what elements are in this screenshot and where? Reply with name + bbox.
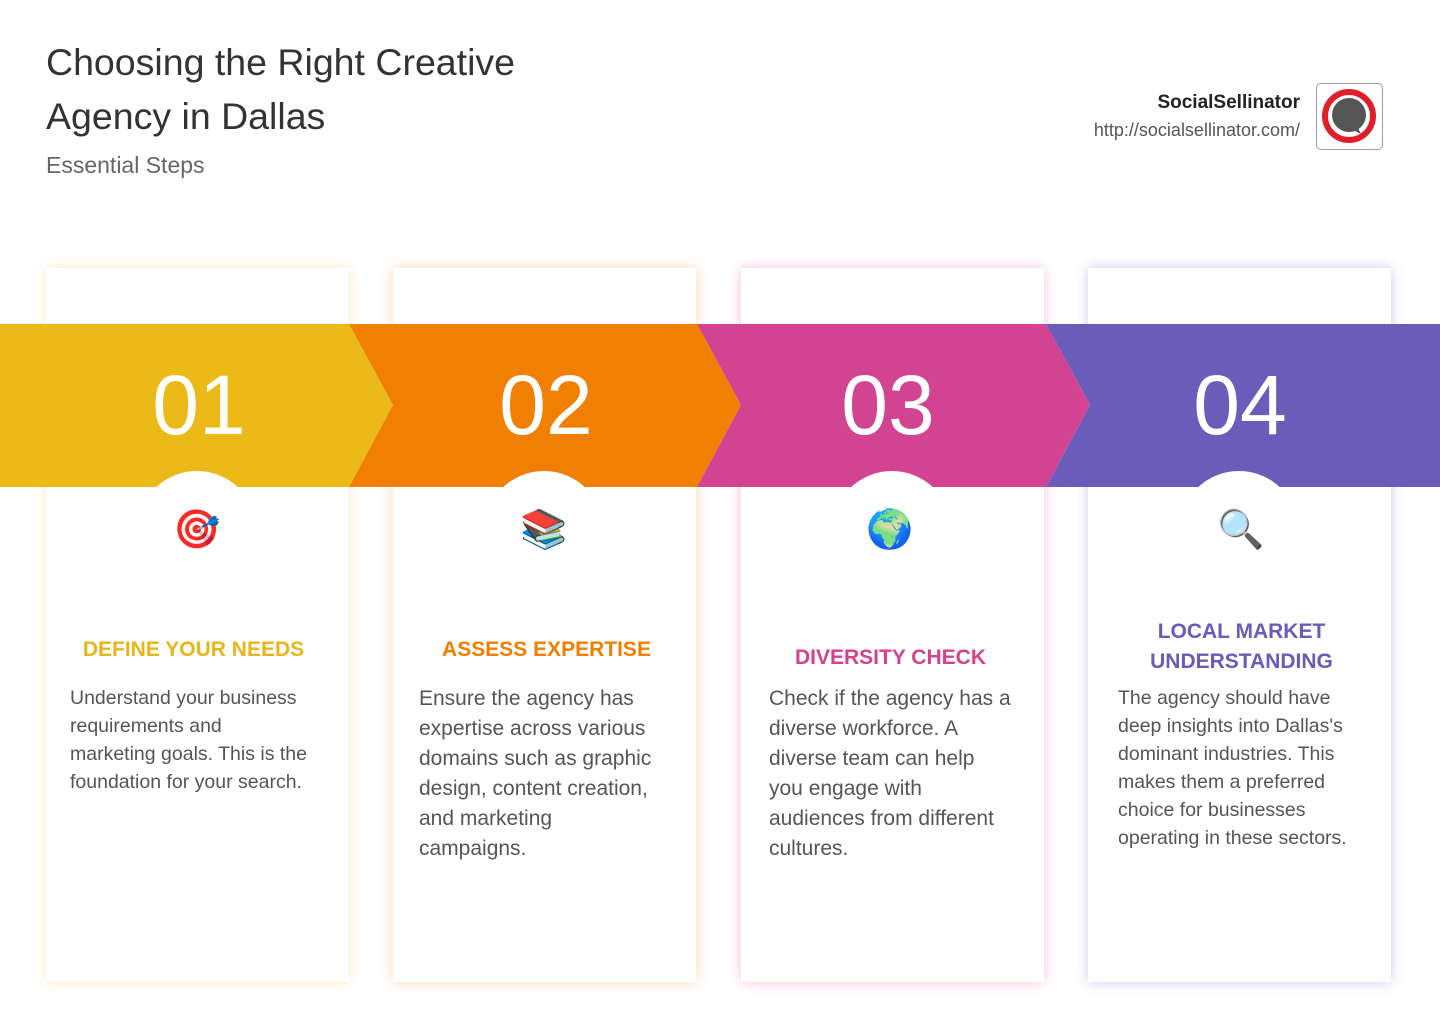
icon: books: 📚 xyxy=(520,509,568,551)
arrow band: 01 xyxy=(152,358,246,452)
text 2: design, content creation, xyxy=(419,777,648,800)
text 1: marketing goals. This is the xyxy=(70,743,307,765)
card 2 xyxy=(393,268,696,982)
text 3: diverse team can help xyxy=(769,747,974,770)
brand text: SocialSellinator xyxy=(1157,92,1300,113)
logo xyxy=(1316,83,1383,150)
text 2: expertise across various xyxy=(419,717,645,740)
title xyxy=(46,41,515,137)
icon: globe: 🌍 xyxy=(866,509,914,551)
text 3: you engage with xyxy=(769,777,922,800)
text 4: makes them a preferred xyxy=(1118,771,1325,793)
arrow band: 03 xyxy=(841,358,935,452)
text 4: operating in these sectors. xyxy=(1118,827,1347,849)
card 4 xyxy=(1088,268,1391,982)
text 3: diverse workforce. A xyxy=(769,717,958,740)
heading 4 xyxy=(1150,620,1333,673)
heading 4: UNDERSTANDING xyxy=(1150,650,1333,673)
title: Agency in Dallas xyxy=(46,95,325,137)
heading 3: DIVERSITY CHECK xyxy=(795,646,986,669)
icon: target: 🎯 xyxy=(173,509,221,551)
heading 2: ASSESS EXPERTISE xyxy=(442,638,651,661)
text 1: requirements and xyxy=(70,715,222,737)
text 4: dominant industries. This xyxy=(1118,743,1334,765)
text 3: Check if the agency has a xyxy=(769,687,1011,710)
text 3: cultures. xyxy=(769,837,848,860)
text 3 xyxy=(769,687,1011,860)
text 4: The agency should have xyxy=(1118,687,1330,709)
text 2 xyxy=(419,687,651,860)
card 1 xyxy=(46,268,349,982)
text 1: Understand your business xyxy=(70,687,297,709)
text 1: foundation for your search. xyxy=(70,771,302,793)
text 4 xyxy=(1118,687,1347,849)
heading 1: DEFINE YOUR NEEDS xyxy=(83,638,304,661)
card 3 xyxy=(741,268,1044,982)
text 3: audiences from different xyxy=(769,807,994,830)
brand text: http://socialsellinator.com/ xyxy=(1094,120,1300,140)
icon: magnifier: 🔍 xyxy=(1217,509,1265,551)
text 4: deep insights into Dallas's xyxy=(1118,715,1343,737)
arrow band: 04 xyxy=(1193,358,1287,452)
brand text xyxy=(1094,92,1300,140)
text 2: Ensure the agency has xyxy=(419,687,634,710)
text 4: choice for businesses xyxy=(1118,799,1306,821)
heading 4: LOCAL MARKET xyxy=(1158,620,1325,643)
subtitle: Essential Steps xyxy=(46,152,205,178)
text 2: and marketing xyxy=(419,807,552,830)
arrow band: 02 xyxy=(499,358,593,452)
text 2: domains such as graphic xyxy=(419,747,651,770)
text 2: campaigns. xyxy=(419,837,526,860)
title: Choosing the Right Creative xyxy=(46,41,515,83)
text 1 xyxy=(70,687,307,793)
